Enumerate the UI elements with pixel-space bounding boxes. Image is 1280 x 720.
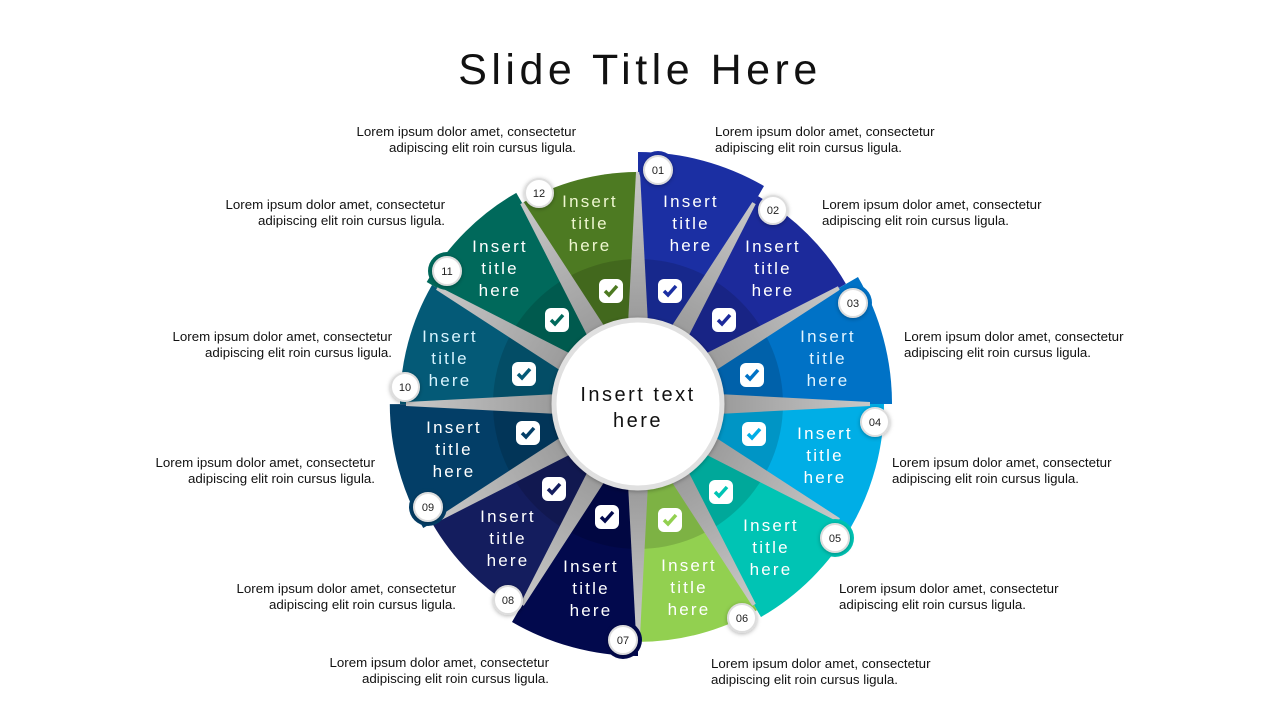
description 06 — [711, 656, 930, 687]
description 10: adipiscing elit roin cursus ligula. — [205, 345, 392, 360]
description 01 — [715, 124, 934, 155]
center circle: here — [613, 410, 663, 432]
description 01: adipiscing elit roin cursus ligula. — [715, 140, 902, 155]
check icons — [512, 279, 766, 532]
description 08: Lorem ipsum dolor amet, consectetur — [236, 581, 456, 596]
segment titles: Insert — [663, 192, 719, 211]
description 03 — [904, 329, 1124, 360]
description 01: Lorem ipsum dolor amet, consectetur — [715, 124, 934, 139]
segment titles: Insert — [422, 327, 478, 346]
segment titles: here — [569, 236, 611, 255]
segment titles: Insert — [800, 327, 856, 346]
segment titles: title — [435, 440, 473, 459]
number badges: 11 — [441, 266, 453, 278]
number badges — [391, 151, 889, 659]
description 04: adipiscing elit roin cursus ligula. — [892, 471, 1079, 486]
description 03: Lorem ipsum dolor amet, consectetur — [904, 329, 1124, 344]
title: Slide Title Here — [458, 46, 822, 94]
description 04: Lorem ipsum dolor amet, consectetur — [892, 455, 1112, 470]
description 06: adipiscing elit roin cursus ligula. — [711, 672, 898, 687]
segment titles: title — [670, 578, 708, 597]
description 08: adipiscing elit roin cursus ligula. — [269, 597, 456, 612]
segment titles: Insert — [472, 237, 528, 256]
segment titles: Insert — [426, 418, 482, 437]
segment titles: title — [489, 529, 527, 548]
dark inner ring — [493, 259, 783, 549]
center circle: Insert text — [580, 384, 696, 406]
segment titles: here — [668, 600, 710, 619]
description 09: Lorem ipsum dolor amet, consectetur — [156, 455, 375, 470]
description 02: adipiscing elit roin cursus ligula. — [822, 213, 1009, 228]
segment titles: here — [487, 551, 529, 570]
segment titles: Insert — [745, 237, 801, 256]
number badges: 10 — [399, 382, 411, 394]
description 10: Lorem ipsum dolor amet, consectetur — [172, 329, 392, 344]
number badges: 01 — [652, 165, 664, 177]
segment titles: title — [481, 259, 519, 278]
segment titles: title — [571, 214, 609, 233]
segment titles: title — [672, 214, 710, 233]
segment titles: title — [754, 259, 792, 278]
segment titles: here — [670, 236, 712, 255]
segment titles: here — [752, 281, 794, 300]
segment titles: here — [570, 601, 612, 620]
description 04 — [892, 455, 1112, 486]
segment titles: Insert — [562, 192, 618, 211]
segment titles: Insert — [797, 424, 853, 443]
segment titles: Insert — [480, 507, 536, 526]
segment titles: title — [572, 579, 610, 598]
segment titles: title — [431, 349, 469, 368]
number badges: 05 — [829, 533, 841, 545]
description 05: Lorem ipsum dolor amet, consectetur — [839, 581, 1058, 596]
number badges: 08 — [502, 595, 514, 607]
spokes — [406, 172, 870, 636]
center circle — [554, 320, 722, 488]
description 12: adipiscing elit roin cursus ligula. — [389, 140, 576, 155]
description 05: adipiscing elit roin cursus ligula. — [839, 597, 1026, 612]
segment titles: title — [752, 538, 790, 557]
description 02 — [822, 197, 1042, 228]
description 07 — [330, 655, 549, 686]
number badges: 06 — [736, 613, 748, 625]
description 05 — [839, 581, 1058, 612]
description 11: Lorem ipsum dolor amet, consectetur — [226, 197, 445, 212]
number badges: 12 — [533, 188, 545, 200]
segment titles: here — [807, 371, 849, 390]
description 07: adipiscing elit roin cursus ligula. — [362, 671, 549, 686]
segment titles: here — [429, 371, 471, 390]
description 09: adipiscing elit roin cursus ligula. — [188, 471, 375, 486]
description 07: Lorem ipsum dolor amet, consectetur — [330, 655, 549, 670]
number badges: 04 — [869, 417, 881, 429]
description 11 — [226, 197, 445, 228]
description 08 — [236, 581, 456, 612]
segments — [361, 145, 921, 670]
number badges: 02 — [767, 205, 779, 217]
description 10 — [172, 329, 392, 360]
description 11: adipiscing elit roin cursus ligula. — [258, 213, 445, 228]
number badges: 09 — [422, 502, 434, 514]
description 06: Lorem ipsum dolor amet, consectetur — [711, 656, 930, 671]
segment titles: title — [806, 446, 844, 465]
description 09 — [156, 455, 375, 486]
description 03: adipiscing elit roin cursus ligula. — [904, 345, 1091, 360]
segment titles: here — [479, 281, 521, 300]
description 02: Lorem ipsum dolor amet, consectetur — [822, 197, 1042, 212]
number badges: 03 — [847, 298, 859, 310]
segment titles: here — [804, 468, 846, 487]
segment titles: here — [750, 560, 792, 579]
number badges: 07 — [617, 635, 629, 647]
segment titles: Insert — [661, 556, 717, 575]
segment titles: title — [809, 349, 847, 368]
segment titles: here — [433, 462, 475, 481]
description 12 — [356, 124, 576, 155]
description 12: Lorem ipsum dolor amet, consectetur — [356, 124, 576, 139]
segment titles: Insert — [743, 516, 799, 535]
segment titles — [422, 192, 856, 620]
segment titles: Insert — [563, 557, 619, 576]
